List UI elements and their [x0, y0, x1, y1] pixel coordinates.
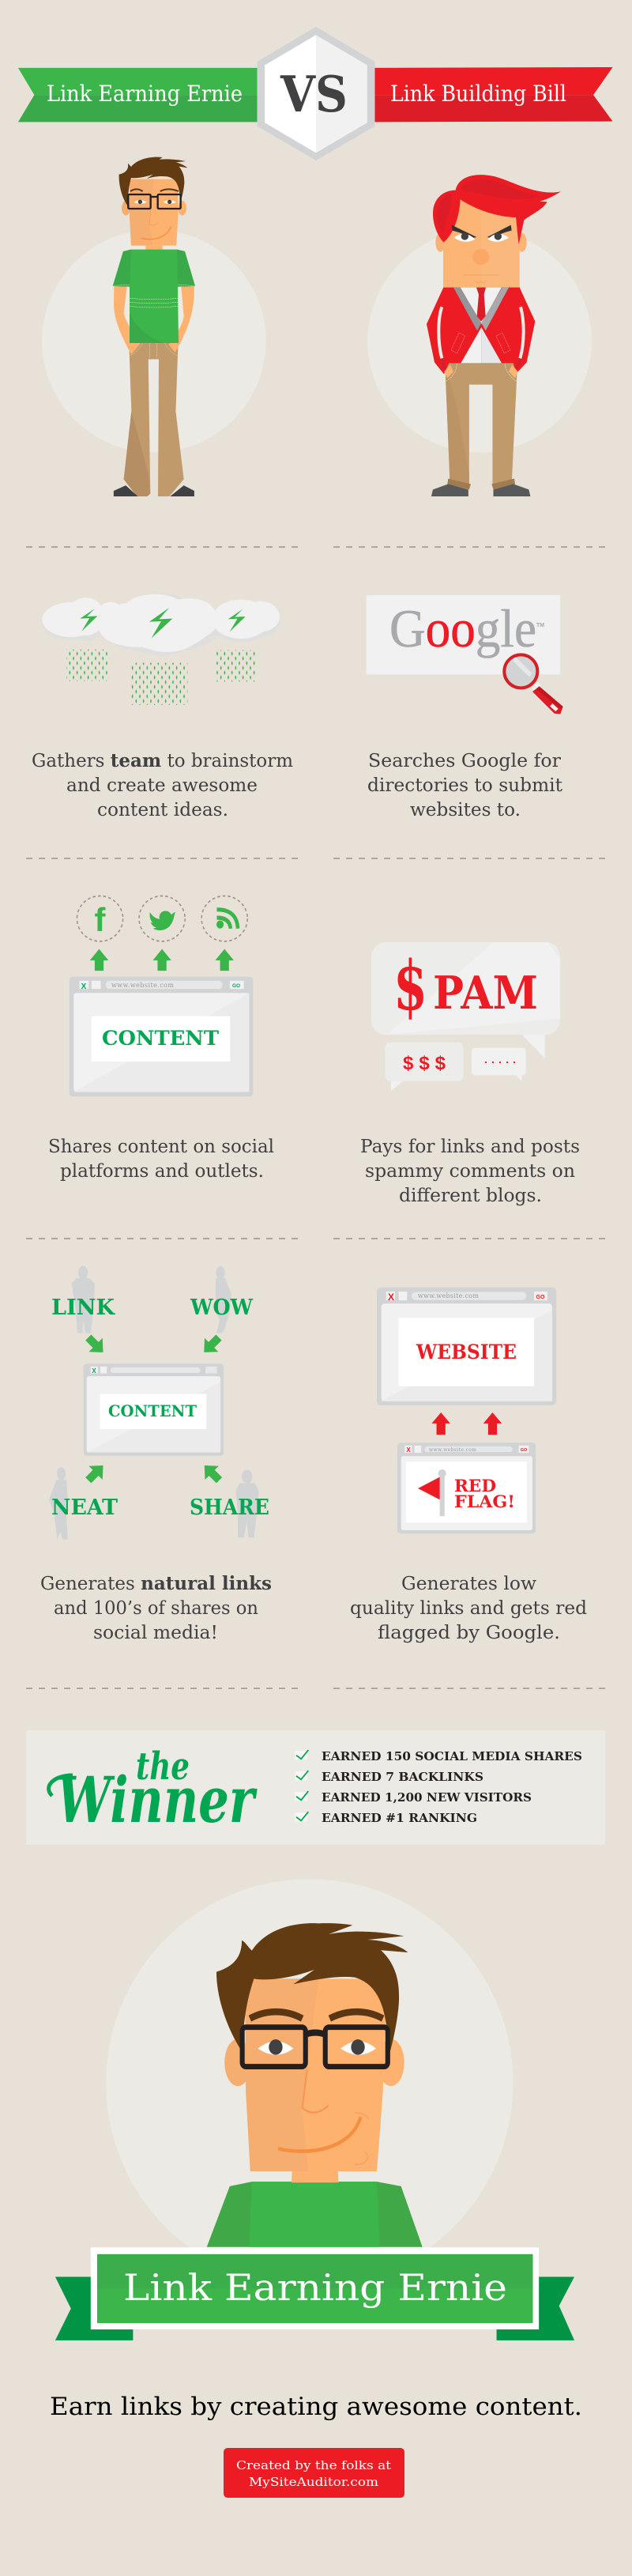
- browser go: GO: [536, 1295, 545, 1300]
- divider row 3: [26, 1238, 606, 1239]
- CONTENT label: CONTENT: [108, 1401, 197, 1420]
- divider row 4: [26, 1688, 606, 1689]
- panel: social sharing: [48, 896, 274, 1182]
- divider row 2: [26, 858, 606, 859]
- button X: X: [388, 1292, 394, 1303]
- caption line: different blogs.: [399, 1186, 542, 1206]
- header: versus banner: [18, 27, 613, 160]
- browser go: GO: [232, 983, 240, 989]
- WOW label: WOW: [190, 1296, 254, 1320]
- caption line: quality links and gets red: [350, 1598, 587, 1619]
- browser URL: www.website.com: [418, 1292, 479, 1299]
- panel: spam bubbles: [360, 942, 580, 1206]
- browser go: GO: [521, 1448, 528, 1453]
- SHARE label: SHARE: [190, 1495, 269, 1520]
- icon: magnifier: [504, 654, 563, 714]
- caption: brainstorm: Gathers team to brainstorm: [32, 750, 293, 771]
- panel: brainstorm clouds: [32, 593, 293, 820]
- caption line: websites to.: [410, 800, 521, 820]
- CONTENT label: CONTENT: [102, 1027, 219, 1050]
- caption: spam: Pays for links and posts: [360, 1137, 580, 1157]
- trademark: TM: [536, 623, 544, 628]
- tagline: Earn links by creating awesome content.: [50, 2393, 582, 2421]
- credit line: MySiteAuditor.com: [249, 2476, 378, 2489]
- browser button X: X: [406, 1446, 411, 1454]
- caption line: flagged by Google.: [378, 1623, 560, 1643]
- panel: the winner: [26, 1730, 605, 1845]
- NEAT label: NEAT: [51, 1495, 118, 1520]
- browser URL: www.website.com: [429, 1447, 476, 1453]
- character: Link Building Bill full body: [367, 175, 592, 496]
- icon: facebook: f: [95, 901, 106, 938]
- caption: social: Shares content on social: [48, 1137, 274, 1157]
- credit badge: [224, 2448, 404, 2498]
- credit line: Created by the folks at: [236, 2460, 391, 2472]
- character: Link Earning Ernie full body: [42, 157, 266, 496]
- caption: Google: Searches Google for: [368, 751, 561, 771]
- caption line: and 100’s of shares on: [54, 1598, 258, 1619]
- FLAG label: FLAG!: [454, 1492, 515, 1511]
- WEBSITE label: WEBSITE: [416, 1341, 517, 1363]
- right ribbon label: Link Building Bill: [390, 81, 566, 107]
- the: the: [136, 1744, 190, 1789]
- RED label: RED: [454, 1476, 496, 1495]
- caption line: spammy comments on: [365, 1161, 575, 1182]
- character: Ernie portrait: [106, 1879, 513, 2287]
- dollar sign: $: [393, 946, 427, 1026]
- caption: red flag: Generates low: [401, 1574, 536, 1594]
- PAM: PAM: [433, 967, 538, 1020]
- small dollars: $ $ $: [403, 1053, 446, 1074]
- caption line: platforms and outlets.: [60, 1161, 264, 1182]
- caption line: directories to submit: [367, 775, 563, 796]
- list item: EARNED #1 RANKING: [322, 1811, 477, 1825]
- list item: EARNED 150 SOCIAL MEDIA SHARES: [322, 1749, 582, 1763]
- google wordmark: Google: [389, 598, 536, 658]
- caption line: and create awesome: [66, 775, 258, 796]
- W swash: [49, 1775, 73, 1796]
- caption line: content ideas.: [97, 800, 228, 820]
- panel: natural links: [40, 1265, 272, 1643]
- browser button X: X: [92, 1367, 96, 1375]
- VS label: VS: [280, 65, 348, 123]
- left ribbon label: Link Earning Ernie: [47, 81, 243, 107]
- LINK label: LINK: [51, 1296, 116, 1320]
- caption line: social media!: [93, 1623, 218, 1643]
- list item: EARNED 1,200 NEW VISITORS: [322, 1790, 532, 1805]
- divider row 1: [26, 546, 606, 548]
- small dots: .....: [484, 1053, 516, 1065]
- ribbon label: Link Earning Ernie: [123, 2266, 507, 2309]
- browser button X: X: [81, 983, 87, 991]
- caption: natural links: Generates natural links: [40, 1573, 272, 1594]
- browser URL: www.website.com: [111, 982, 174, 989]
- panel: red flagged links: [350, 1288, 587, 1643]
- panel: Google search: [367, 595, 563, 820]
- Winner: Winner: [57, 1763, 258, 1837]
- winner name ribbon: [55, 2247, 574, 2340]
- list item: EARNED 7 BACKLINKS: [322, 1770, 483, 1784]
- checklist icons: [295, 1750, 308, 1821]
